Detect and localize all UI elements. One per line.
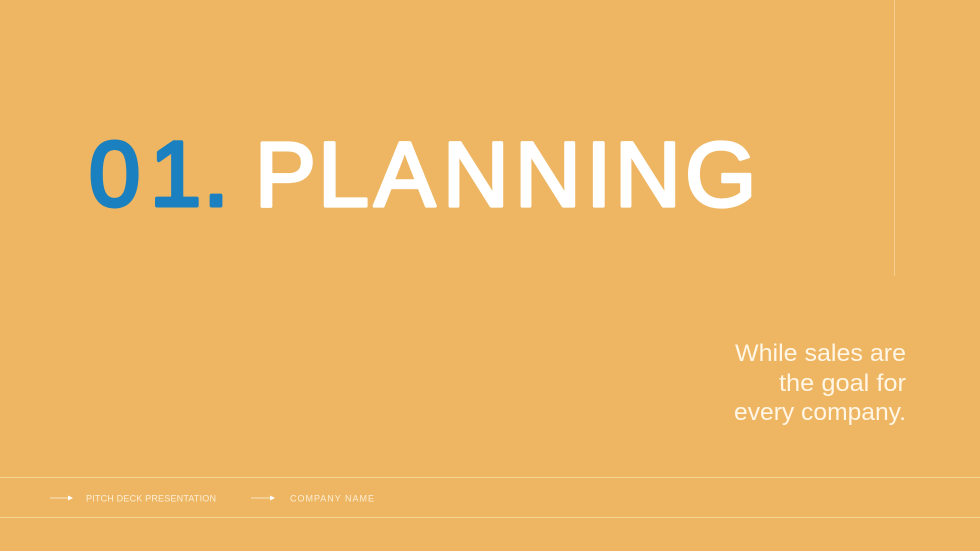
- title: [89, 124, 757, 226]
- tagline text block: [734, 340, 906, 426]
- tagline text block: every company.: [734, 399, 906, 426]
- footer label: company: COMPANY NAME: [290, 494, 374, 504]
- tagline text block: While sales are: [735, 340, 906, 367]
- icon: arrow before company label: [251, 496, 275, 500]
- icon: arrow before presentation label: [50, 496, 73, 500]
- footer label: presentation: PITCH DECK PRESENTATION: [86, 494, 216, 504]
- footer bar: [50, 494, 374, 504]
- tagline text block: the goal for: [779, 370, 906, 397]
- title number: 01.: 01.: [89, 124, 229, 226]
- title word: PLANNING: PLANNING: [255, 124, 757, 226]
